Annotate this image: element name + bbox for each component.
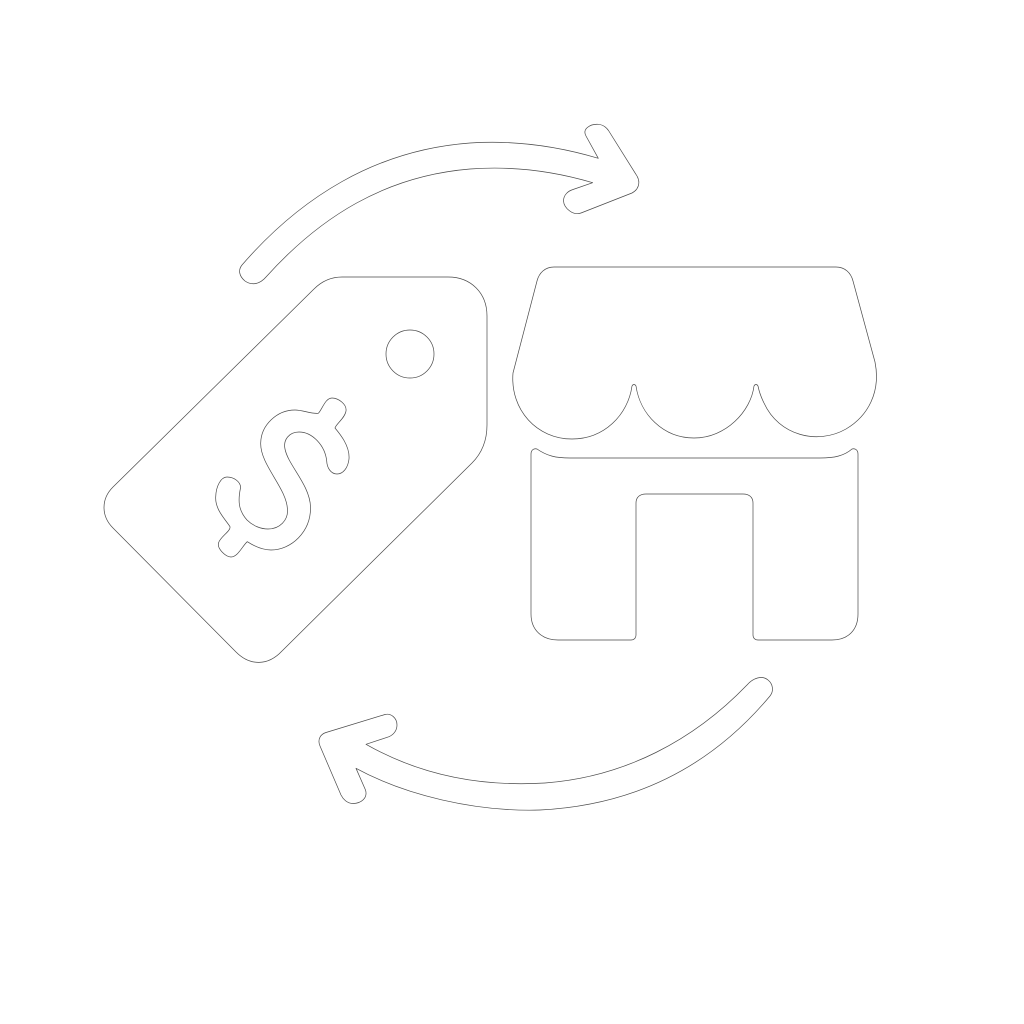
store front with door xyxy=(531,449,858,640)
tag hole xyxy=(386,330,434,378)
icon: price tag xyxy=(104,277,487,662)
icon: store xyxy=(513,267,876,640)
store awning xyxy=(513,267,876,439)
dollar sign xyxy=(216,398,349,557)
arrow: top arrow pointing right xyxy=(240,124,639,284)
arrow: bottom arrow pointing left xyxy=(319,678,772,810)
